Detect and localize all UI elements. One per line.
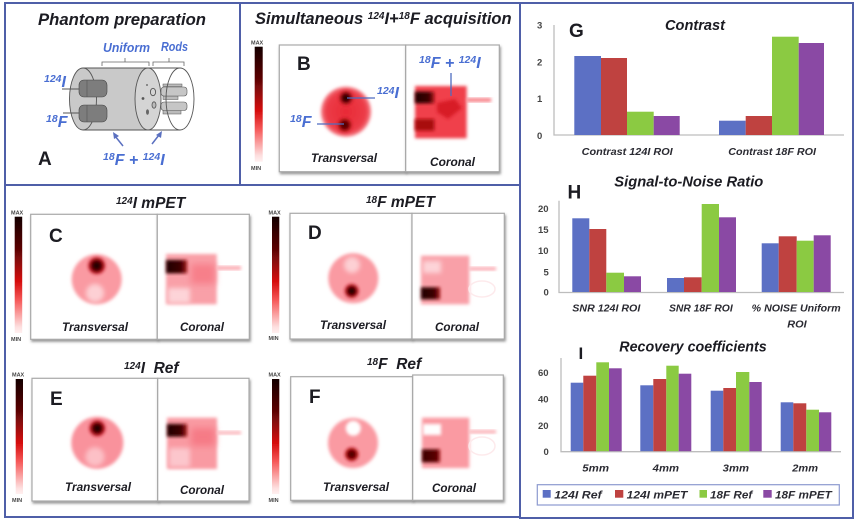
category labels I: 3mm [723,464,749,475]
panel: reference images frame [5,185,520,517]
panel letter B: B [297,54,311,75]
category labels I: 4mm [652,464,679,475]
label: 18F + 124I: 18 [103,151,115,163]
y axis labels I: 60 [538,368,549,379]
bars: 3mm [711,372,762,451]
image group D: 18F mPET [268,194,504,342]
title: recovery coefficients: Recovery coefficients [619,340,767,356]
icon: phantom cylinder [62,68,194,130]
category labels I: 2mm [791,464,818,475]
panel: charts column [520,3,853,518]
panel letter C: C [49,226,63,247]
y axis labels H: 10 [538,246,549,257]
bars: 5mm [571,362,622,451]
label: 18F + 124I: F + [115,152,143,169]
coronal image E [158,378,249,501]
transversal image B: Transversal [311,151,378,165]
category labels I: 5mm [582,464,609,475]
title: phantom preparation: Phantom preparation [38,11,206,29]
transversal image E: Transversal [65,480,132,494]
label: 18F: F [302,114,313,131]
title D: 18 [366,195,378,206]
label: 18F + 124I: 124 [143,151,160,163]
panel letter H: H [568,182,581,204]
category labels G: Contrast 124I ROI [582,147,673,158]
category labels G [582,147,816,158]
category labels H: SNR 124I ROI [572,304,641,315]
title: simultaneous acquisition: I+ [384,10,399,28]
transversal image B [279,45,406,172]
title D: F mPET [377,194,436,211]
label: 124I: I [395,85,400,102]
image group E: 124I Ref [12,360,249,504]
category labels H: SNR 18F ROI [669,304,733,315]
title E: I Ref [141,360,180,377]
colour scale E [12,372,25,504]
label: 18F + 124I: 18 [419,54,431,66]
brace: uniform [102,58,149,66]
title: simultaneous acquisition: F acquisition [410,10,512,28]
label: 124I: 124 [377,85,395,97]
y axis labels I: 20 [538,421,549,432]
arrow: to rods [152,131,162,144]
colour scale D: MAX [268,210,281,216]
label: 124I: I [62,74,67,91]
category labels H: ROI [787,319,807,330]
panel letter D: D [308,223,322,244]
colour scale B [251,40,264,172]
panel letter A: A [38,149,52,170]
image group F: 18F Ref [268,356,503,504]
panel A: phantom preparation [5,3,240,185]
label: Uniform: Uniform [103,41,150,55]
colour scale E: MIN [12,498,22,504]
title: contrast: Contrast [665,18,726,34]
label: 18F + 124I: I [160,152,165,169]
transversal image D: Transversal [320,318,387,332]
title F: F Ref [378,356,423,373]
image group C: 124I mPET [11,195,249,343]
title: simultaneous acquisition: 18 [399,11,410,22]
arrow: to 18F spot [317,123,344,125]
coronal image E: Coronal [180,483,225,497]
label: Rods: Rods [161,40,188,54]
y axis labels I: 0 [544,447,549,458]
axes G [554,25,844,135]
axes H [559,201,844,292]
transversal image D [290,213,412,339]
colour scale C [11,210,24,343]
colour scale D: MIN [268,336,279,342]
y axis labels H: 20 [538,204,549,215]
arrow: to coronal [450,73,452,96]
title F: 18 [367,357,379,368]
transversal image F: Transversal [323,480,390,494]
bars: 2mm [781,402,831,451]
coronal image F: Coronal [432,481,477,495]
colour scale E: MAX [12,372,25,378]
title C: 124 [116,196,133,207]
bars: contrast 124I ROI [574,56,680,135]
colour scale F: MIN [268,498,279,504]
y axis labels H [538,204,550,298]
label: 18F + 124I: I [476,55,481,72]
panel letter E: E [50,389,63,410]
label: 18F: 18 [290,113,302,125]
category labels G: Contrast 18F ROI [728,147,816,158]
title: simultaneous acquisition: Simultaneous [255,10,368,28]
colour scale F: MAX [268,372,281,378]
panel letter G: G [569,21,584,42]
transversal image C [31,214,157,339]
coronal image B [406,45,499,172]
panel letter I: I [578,344,583,363]
y axis labels G: 1 [537,94,543,105]
bars: SNR 124I ROI [572,218,641,292]
title: SNR: Signal-to-Noise Ratio [614,175,763,191]
bars: noise uniform ROI [762,235,831,292]
label: 18F + 124I: 124 [459,54,476,66]
colour scale F [268,372,281,504]
legend: 18F mPET [775,489,833,501]
category labels H: % NOISE Uniform [752,304,841,315]
label: 18F: 18 [46,113,58,125]
transversal image E [32,378,158,501]
title E: 124 [124,361,141,372]
title C: I mPET [133,195,187,212]
bars: contrast 18F ROI [719,37,824,135]
axes I [561,358,841,452]
y axis labels G: 3 [537,20,542,32]
category labels H [572,304,841,330]
y axis labels I: 40 [538,394,549,406]
legend: 18F Ref [710,489,754,501]
legend: 124I Ref [554,489,603,501]
coronal image D [412,213,504,339]
coronal image B: Coronal [430,155,476,169]
y axis labels G [537,20,543,142]
y axis labels G: 2 [537,58,542,68]
legend: 124I mPET [627,489,689,501]
bars: 4mm [640,366,691,451]
bars: SNR 18F ROI [667,204,736,292]
y axis labels H: 5 [544,268,550,278]
legend [537,485,839,505]
chart H: signal-to-noise ratio [538,175,844,330]
label: 18F + 124I: F + [431,55,459,72]
y axis labels G: 0 [537,131,542,142]
arrow: to 124I spot [347,97,375,99]
coronal image D: Coronal [435,320,480,334]
label: 18F: F [58,114,69,131]
arrow: to uniform [113,132,123,146]
coronal image C: Coronal [180,320,225,334]
brace: rods [153,58,184,66]
colour scale C: MIN [11,337,21,343]
chart G: contrast [537,18,844,158]
colour scale C: MAX [11,210,24,216]
colour scale B: MIN [251,166,261,172]
panel B: simultaneous acquisition [240,3,520,185]
y axis labels I [538,368,549,458]
colour scale D [268,210,281,342]
transversal image C: Transversal [62,320,129,334]
y axis labels H: 0 [544,288,549,298]
coronal image C [157,214,249,339]
panel letter F: F [309,387,321,408]
chart I: recovery coefficients [537,340,841,505]
transversal image F [291,377,413,500]
coronal image F [413,375,503,500]
colour scale B: MAX [251,40,264,46]
y axis labels H: 15 [538,225,549,236]
category labels I [582,464,818,475]
label: 124I: 124 [44,73,62,85]
title: simultaneous acquisition: 124 [368,11,385,22]
